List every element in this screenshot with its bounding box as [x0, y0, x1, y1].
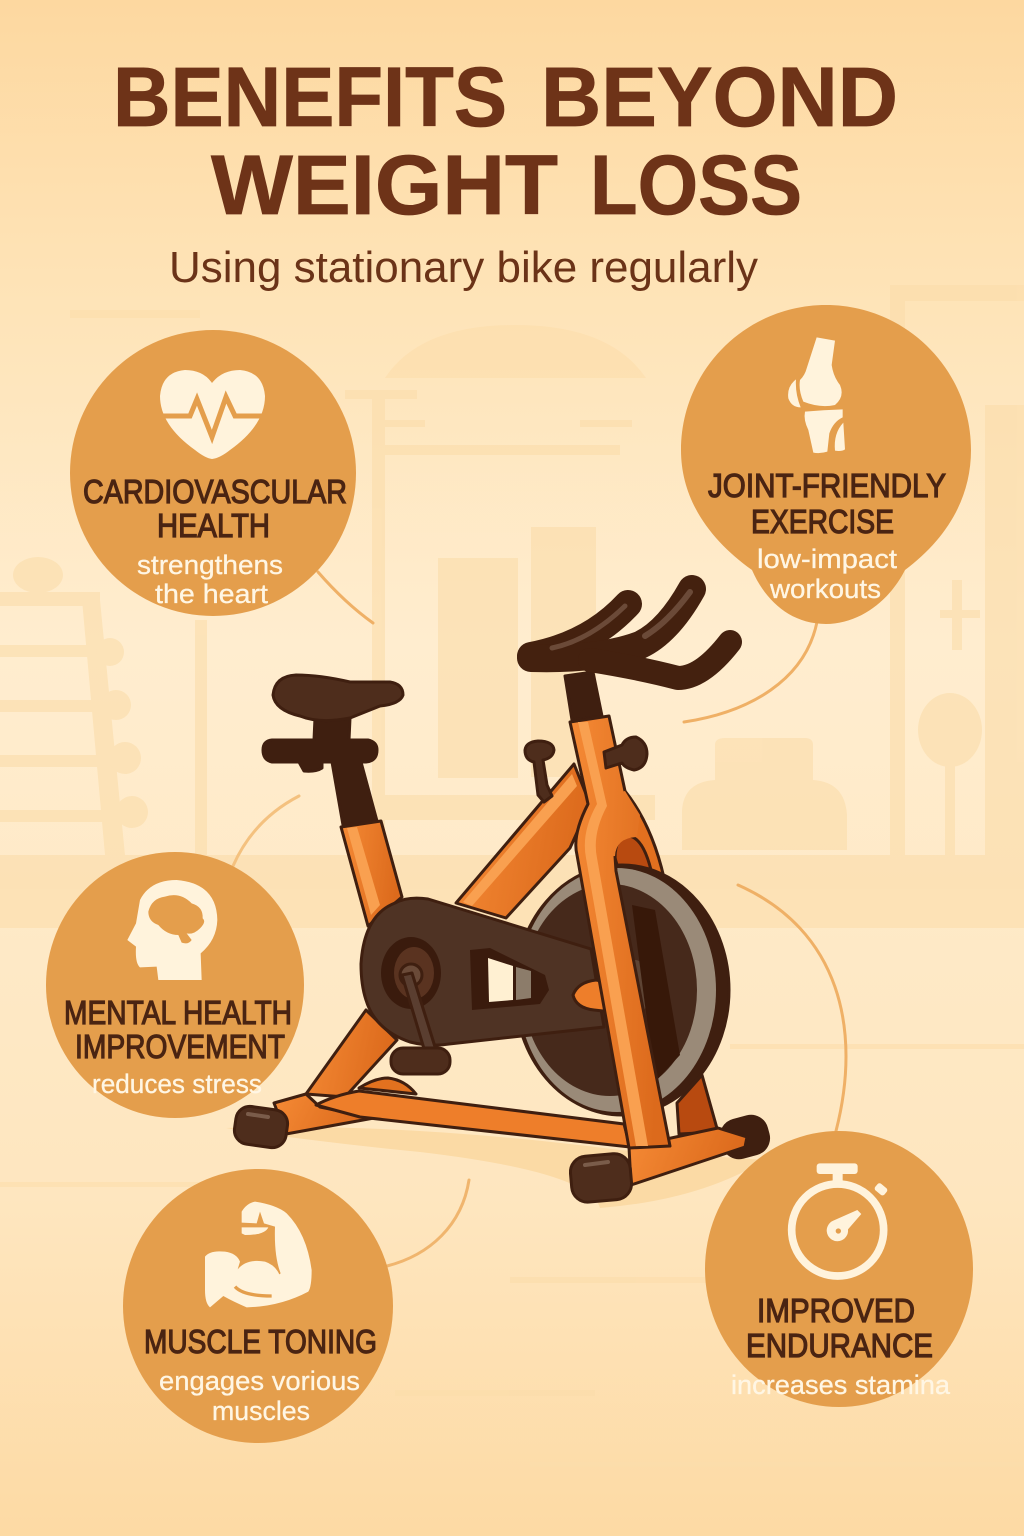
heading line 2: HEALTH [157, 507, 270, 544]
heading line 2: IMPROVEMENT [75, 1028, 285, 1065]
case pocket [470, 948, 549, 1010]
crank hub [400, 964, 422, 986]
right front foot [569, 1152, 633, 1203]
description line 2: the heart [155, 579, 269, 609]
description: low-impact [757, 544, 898, 574]
description: engages vorious [159, 1366, 360, 1396]
bubble: cardiovascular health [70, 330, 356, 616]
right rear foot [718, 1113, 772, 1161]
title: LOSS [590, 138, 802, 232]
handlebar stem [565, 672, 602, 720]
bubble shape [123, 1169, 393, 1443]
resistance knob [525, 741, 554, 802]
saddle [273, 675, 403, 721]
connector: cardiovascular [318, 572, 373, 623]
icon: flexed bicep [205, 1202, 312, 1307]
main frame column [570, 716, 670, 1148]
icon: heart with pulse [158, 370, 268, 459]
orange hub [573, 980, 612, 1012]
connector: joint-friendly [684, 622, 817, 722]
wheel through opening [516, 967, 531, 1000]
seat knob [604, 737, 647, 770]
fork arm [600, 790, 664, 884]
crank arm [402, 973, 436, 1052]
description: increases stamina [731, 1370, 951, 1400]
seat tube [341, 821, 402, 926]
heading line 2: EXERCISE [751, 503, 894, 540]
icon: stopwatch [792, 1163, 888, 1276]
small base piece [359, 1078, 416, 1094]
icon: head with brain [127, 880, 217, 980]
bubble shape [681, 305, 971, 624]
bike floor shadow [226, 1127, 765, 1208]
title [113, 50, 898, 232]
bubble shape [46, 852, 304, 1118]
flywheel [515, 865, 729, 1115]
top tube [456, 764, 590, 918]
heading: IMPROVED [757, 1292, 915, 1329]
bubble shape [70, 330, 356, 616]
rear leg [677, 1075, 718, 1134]
bubble: mental health improvement [46, 852, 304, 1118]
connector: endurance [738, 885, 846, 1131]
case opening [488, 958, 513, 1002]
bubble shape [705, 1131, 973, 1407]
chain case [361, 898, 604, 1045]
gym backdrop silhouettes [0, 285, 1024, 1467]
main frame edges [570, 716, 670, 1148]
description: strengthens [137, 550, 283, 580]
crank disc [381, 937, 441, 1009]
pedal [391, 1048, 450, 1074]
description line 2: muscles [212, 1396, 310, 1426]
crank disc inner [394, 947, 434, 999]
handlebars [531, 589, 730, 678]
icon: knee joint [788, 337, 845, 453]
stationary bike [233, 589, 772, 1203]
heading: JOINT-FRIENDLY [708, 467, 946, 504]
bubble: improved endurance [705, 1131, 973, 1407]
description line 2: workouts [769, 574, 881, 604]
top tube highlight [463, 774, 577, 906]
heading: CARDIOVASCULAR [83, 473, 347, 510]
heading: MENTAL HEALTH [64, 994, 292, 1031]
title: WEIGHT [211, 138, 558, 232]
fork arch [615, 836, 651, 870]
long base bar [316, 1091, 630, 1147]
connector: mental health [233, 796, 299, 866]
title: BEYOND [541, 50, 898, 144]
seat post [332, 762, 377, 825]
heading line 2: ENDURANCE [746, 1327, 933, 1364]
front base bar [629, 1128, 747, 1185]
connector: muscle toning [387, 1180, 469, 1266]
lower diagonal leg [306, 1010, 397, 1097]
left foot [233, 1105, 289, 1149]
frame highlight [578, 722, 648, 1146]
seat tube highlight [347, 827, 380, 915]
title: BENEFITS [113, 50, 507, 144]
seat bar [263, 718, 377, 771]
bubble: joint-friendly exercise [681, 305, 971, 624]
heading: MUSCLE TONING [144, 1323, 377, 1360]
subtitle: Using stationary bike regularly [169, 243, 758, 292]
bubble: muscle toning [123, 1169, 393, 1443]
description: reduces stress [92, 1069, 262, 1099]
rear base bar [274, 1094, 374, 1134]
